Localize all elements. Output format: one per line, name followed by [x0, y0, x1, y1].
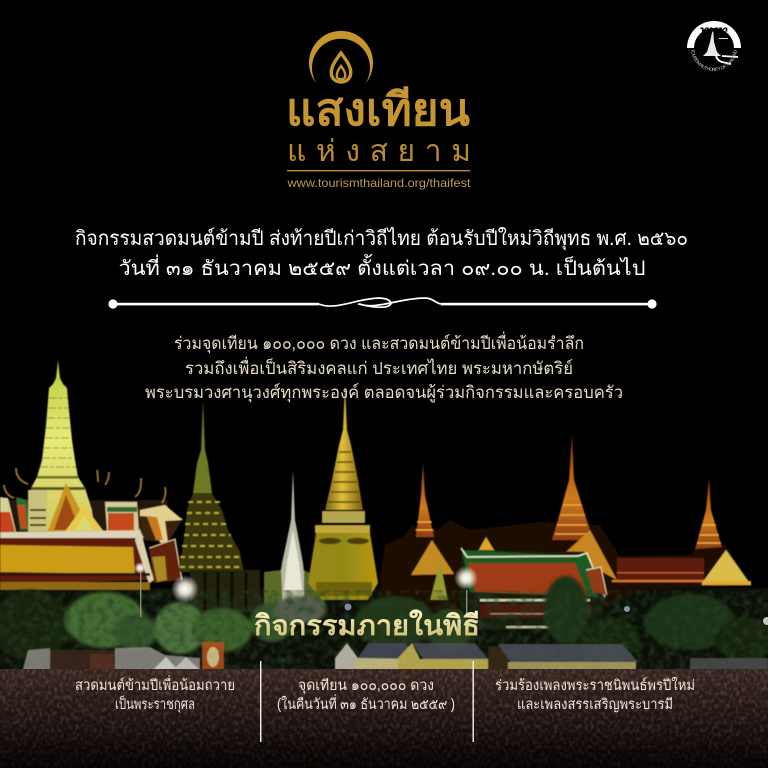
logo: Tourism Authority of Thailand	[687, 21, 741, 71]
temple skyline photo	[0, 360, 768, 768]
activity column: prayer: สวดมนต์ข้ามปีเพื่อน้อมถวาย	[75, 675, 235, 694]
ground shadow band	[0, 588, 768, 673]
icon: crescent halo	[309, 31, 373, 84]
left main temple	[0, 468, 183, 543]
green roof temple	[430, 548, 607, 630]
column divider	[260, 661, 261, 742]
crowd with candles	[0, 669, 768, 768]
activity column: candles: (ในคืนวันที่ ๓๑ ธันวาคม ๒๕๕๙ )	[277, 694, 455, 713]
spires: right red group	[380, 435, 752, 610]
section heading: activities: กิจกรรมภายในพิธี	[254, 609, 480, 641]
trees	[0, 576, 768, 670]
activity column: songs	[495, 676, 695, 713]
logo: candle light of Siam	[286, 31, 471, 190]
icon: candle flame	[331, 53, 351, 82]
body text: พระบรมวงศานุวงศ์ทุกพระองค์ ตลอดจนผู้ร่วมกิจกรรมและครอบครัว	[145, 383, 623, 403]
festival tents	[22, 642, 768, 672]
activity column: songs: และเพลงสรรเสริญพระบารมี	[517, 696, 673, 713]
dark olive prang	[178, 400, 260, 612]
lower gold-panel hall	[0, 528, 182, 590]
body text	[145, 331, 623, 403]
heading: event date: วันที่ ๓๑ ธันวาคม ๒๕๕๙ ตั้งแต่เวลา ๐๙.๐๐ น. เป็นต้นไป	[118, 254, 646, 280]
activity column: candles	[277, 677, 455, 713]
golden chedi	[308, 385, 378, 600]
logo url: www.tourismthailand.org/thaifest	[286, 176, 471, 190]
logo rule	[287, 170, 470, 171]
activity column: songs: ร่วมร้องเพลงพระราชนิพนธ์พรปีใหม่	[495, 676, 695, 694]
logo: Tourism Authority of Thailand: ททท	[700, 26, 729, 34]
body text: ร่วมจุดเทียน ๑๐๐,๐๐๐ ดวง และสวดมนต์ข้ามปีเพื่อน้อมรำลึก	[174, 331, 584, 354]
main yellow prang	[28, 360, 105, 533]
logo title: แสงเทียน	[286, 84, 470, 135]
lamp glows	[134, 562, 768, 625]
body text: รวมถึงเพื่อเป็นสิริมงคลแก่ ประเทศไทย พระมหากษัตริย์	[185, 356, 573, 378]
activity column: prayer: เป็นพระราชกุศล	[115, 694, 195, 713]
ornamental divider	[108, 298, 657, 309]
activity column: candles: จุดเทียน ๑๐๐,๐๐๐ ดวง	[298, 677, 434, 694]
logo: Tourism Authority of Thailand: TOURISM AUTHORITY OF THAILAND	[691, 49, 737, 71]
heading: event title: กิจกรรมสวดมนต์ข้ามปี ส่งท้ายปีเก่าวิถีไทย ต้อนรับปีใหม่วิถีพุทธ พ.ศ. ๒๕๖๐	[75, 227, 688, 251]
white chedi	[264, 470, 326, 610]
column divider	[472, 661, 474, 742]
logo subtitle: แห่งสยาม	[287, 135, 471, 168]
activity column: prayer	[75, 675, 235, 713]
